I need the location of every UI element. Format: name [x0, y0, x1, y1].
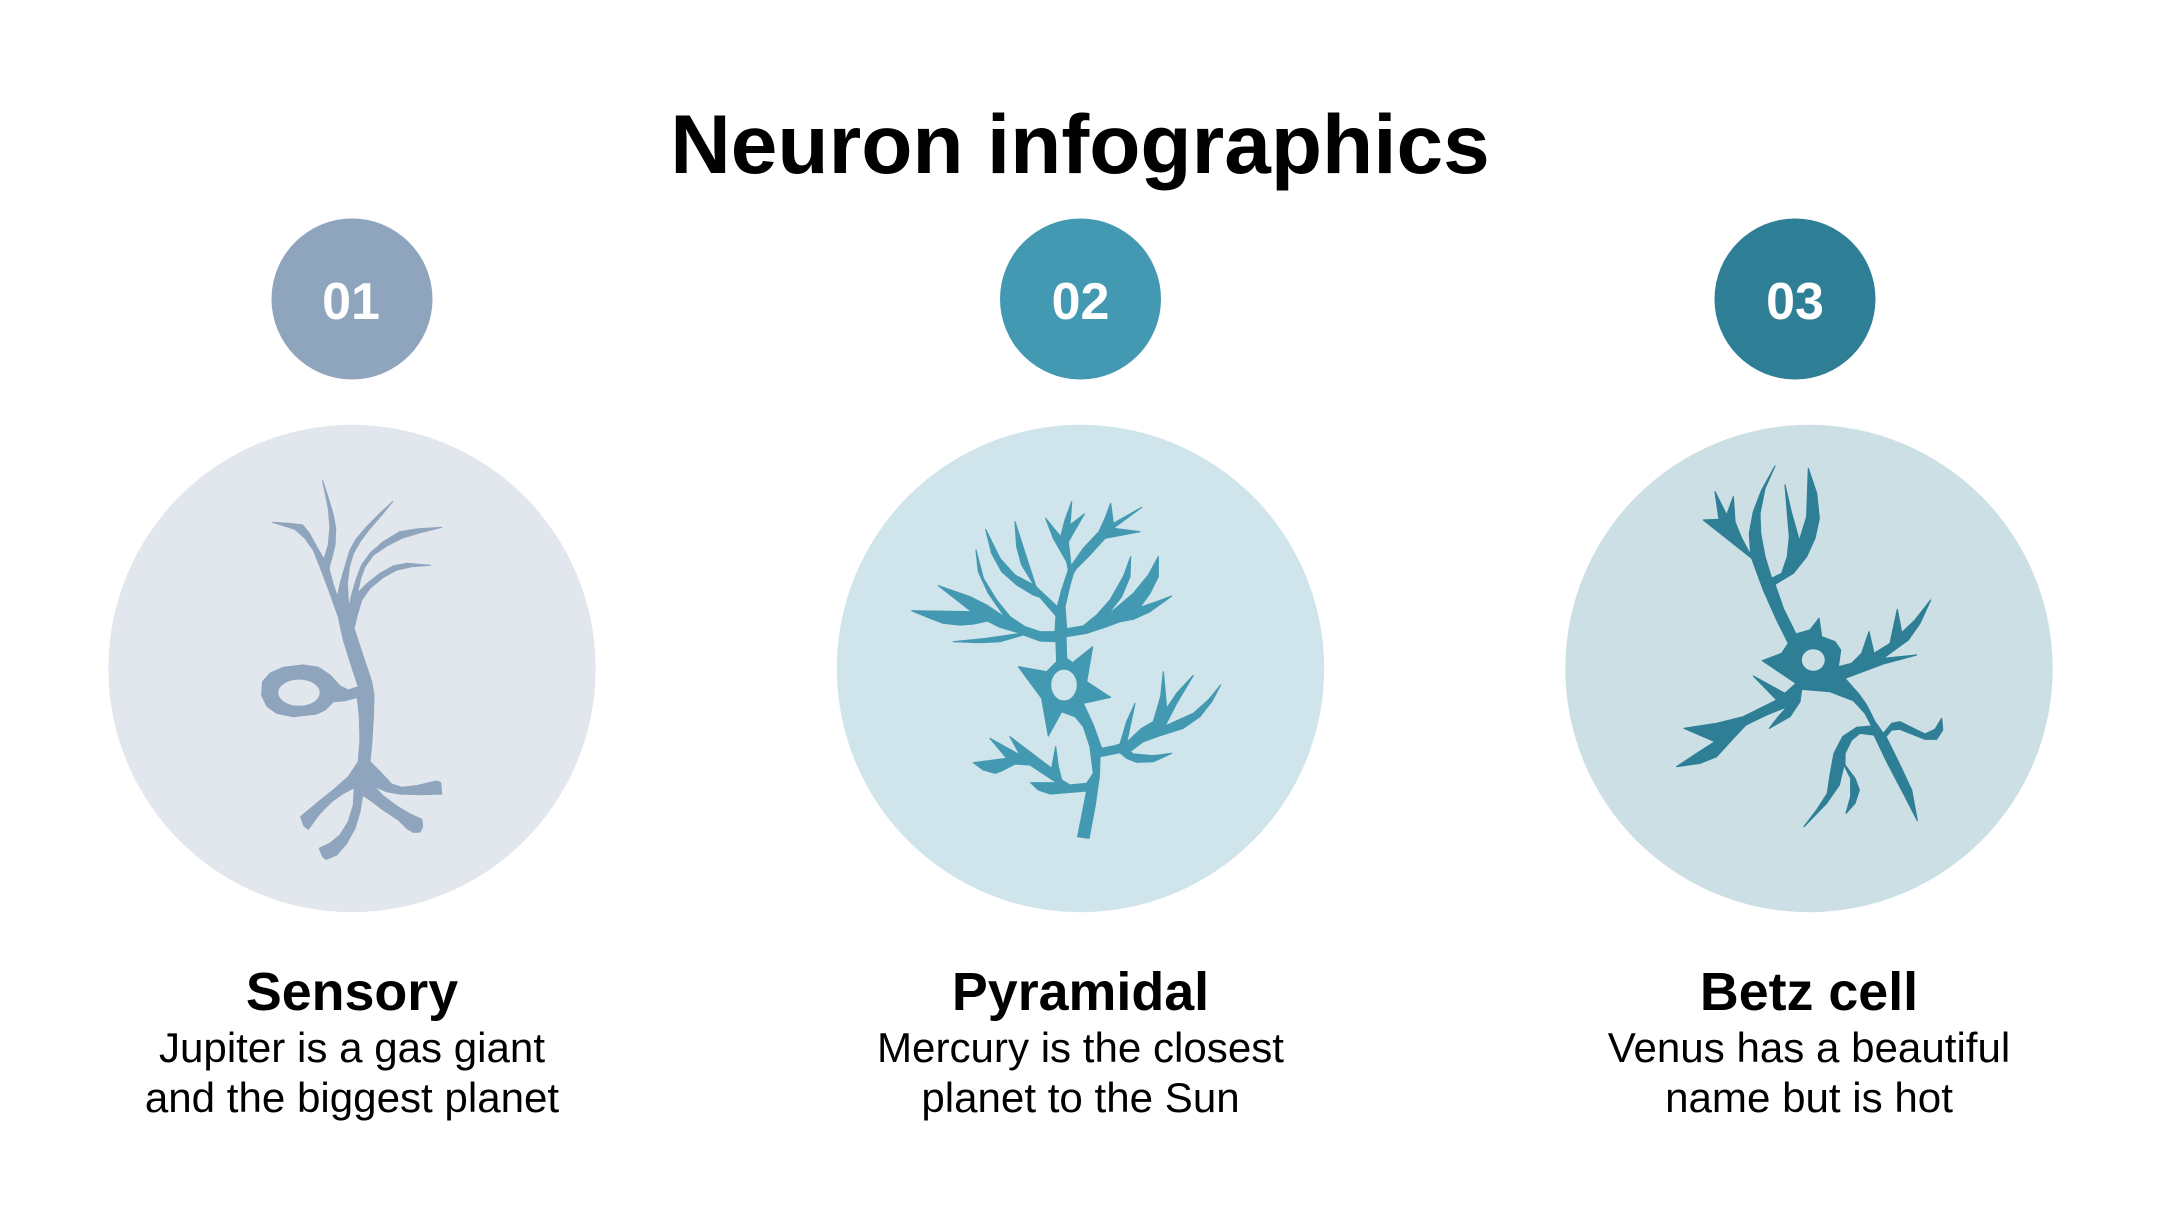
panel: betz cell: [1565, 218, 2053, 1121]
number badge 02: 02: [1052, 273, 1109, 331]
number badge 01: [272, 218, 432, 380]
description: Betz cell: name but is hot: [1665, 1074, 1953, 1121]
icon: betz cell neuron: [1677, 466, 1943, 827]
description: Betz cell: Venus has a beautiful: [1608, 1024, 2010, 1071]
panel: sensory: [108, 218, 596, 1121]
icon: pyramidal neuron: [912, 502, 1221, 838]
number badge 02: [1000, 218, 1161, 380]
heading: Sensory: Sensory: [246, 962, 458, 1022]
heading: Pyramidal: Pyramidal: [952, 962, 1209, 1022]
panel: pyramidal: [837, 218, 1324, 1121]
description: Sensory: Jupiter is a gas giant: [159, 1024, 545, 1071]
number badge 03: [1714, 218, 1876, 380]
background circle pyramidal: [837, 425, 1324, 912]
description: Pyramidal: planet to the Sun: [921, 1074, 1240, 1121]
icon: sensory neuron: [262, 481, 442, 859]
number badge 01: 01: [322, 273, 380, 331]
description: Sensory: and the biggest planet: [145, 1074, 559, 1121]
background circle betz cell: [1565, 425, 2053, 912]
background circle sensory: [108, 425, 596, 912]
heading: Betz cell: Betz cell: [1700, 962, 1918, 1022]
title: Neuron infographics: [670, 97, 1490, 191]
number badge 03: 03: [1766, 273, 1824, 331]
description: Pyramidal: Mercury is the closest: [877, 1024, 1284, 1071]
